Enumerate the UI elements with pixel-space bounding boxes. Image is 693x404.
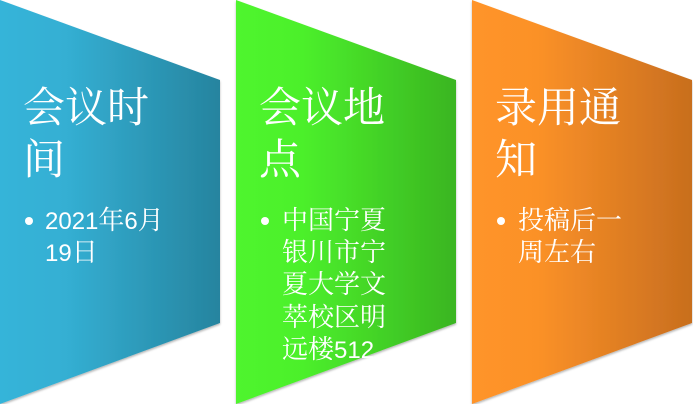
panel: conference time	[0, 0, 220, 404]
text: address: 银川市宁	[282, 232, 386, 269]
text: date: 19	[45, 240, 72, 267]
text: notice timing: 周左右	[518, 232, 596, 269]
panel: conference location	[236, 0, 456, 404]
heading: acceptance notice: 录用通	[495, 75, 621, 135]
text: address: 夏大学文	[282, 264, 386, 301]
heading: acceptance notice: 知	[495, 127, 537, 187]
text: address: 512	[334, 337, 374, 364]
bullet	[497, 217, 505, 225]
text: address: 远楼	[282, 329, 335, 366]
text: address: 中国宁夏	[282, 200, 386, 237]
text: date: 2021	[45, 208, 98, 235]
text: notice timing: 投稿后一	[518, 200, 622, 237]
panel shape: orange trapezoid	[472, 0, 692, 404]
panel shape: green trapezoid	[236, 0, 456, 404]
bullet	[25, 217, 33, 225]
text: date: 日	[72, 232, 98, 269]
panel shape: blue trapezoid	[0, 0, 220, 404]
heading: conference time: 间	[23, 127, 65, 187]
heading: conference time: 会议时	[23, 75, 149, 135]
text: date: 年6月	[98, 200, 164, 237]
heading: conference location: 点	[259, 127, 302, 187]
panel: acceptance notice	[472, 0, 692, 404]
bullet	[261, 217, 269, 225]
text: address: 萃校区明	[282, 297, 386, 334]
heading: conference location: 会议地	[259, 75, 385, 135]
